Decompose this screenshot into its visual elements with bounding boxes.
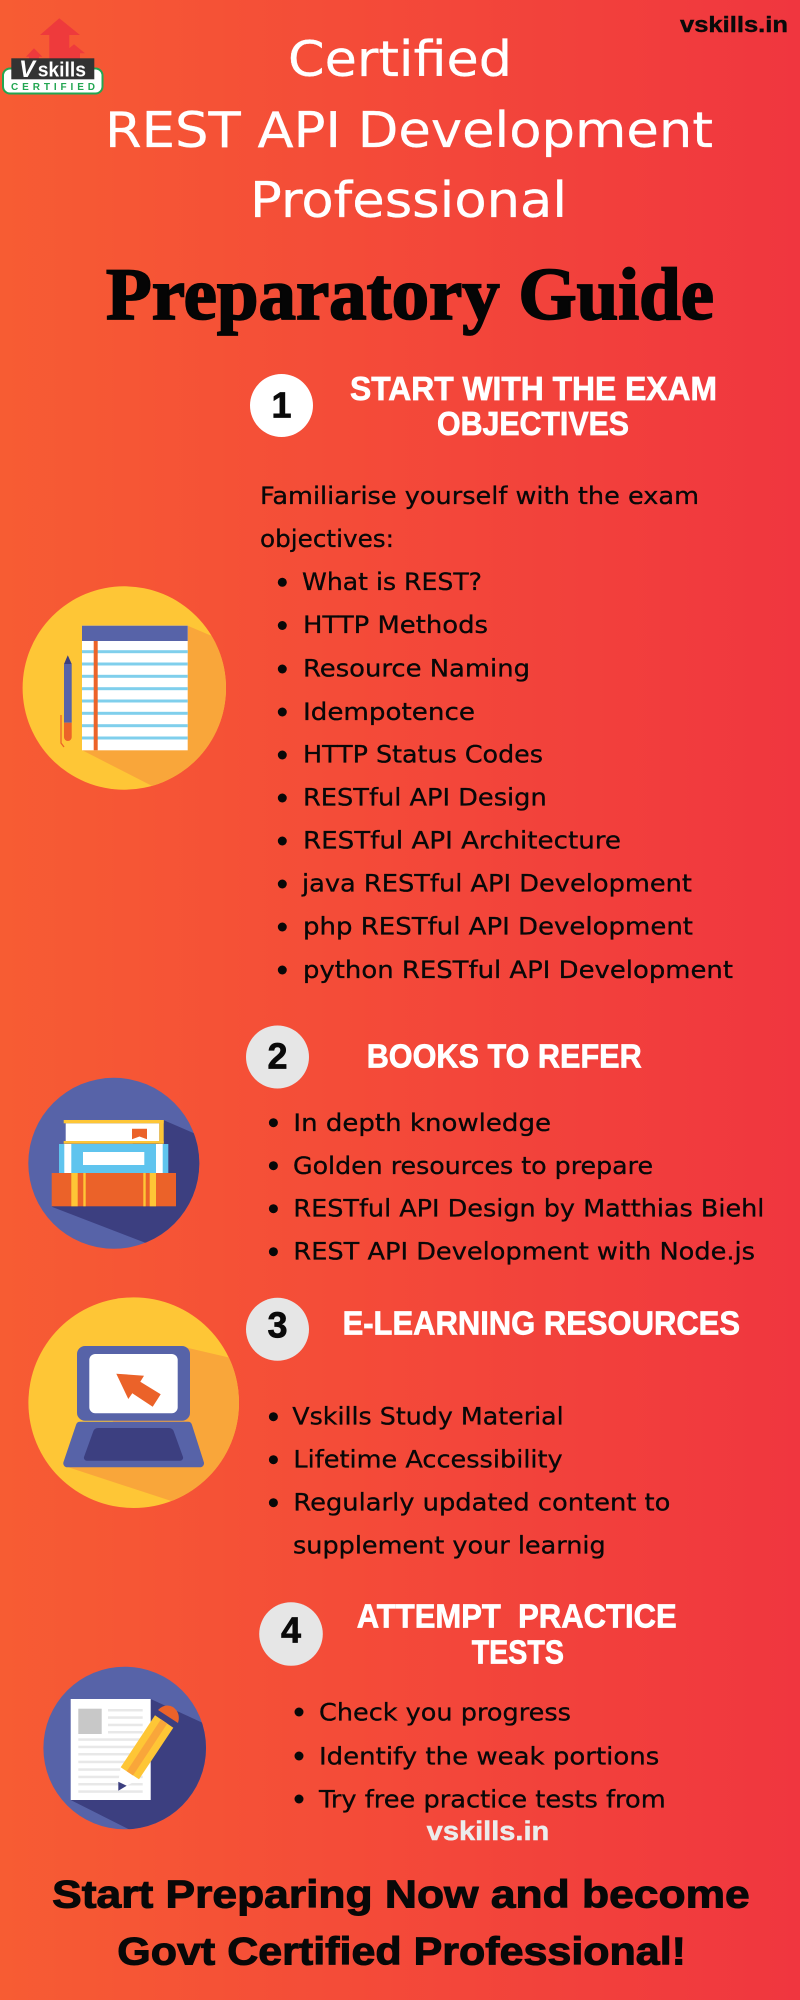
title: Certified xyxy=(288,31,512,88)
logo: Vskills certified: skills xyxy=(38,60,86,82)
title: REST API Development xyxy=(105,102,713,159)
step 4 number badge xyxy=(259,1602,323,1666)
closing call to action: Govt Certified Professional! xyxy=(117,1930,686,1973)
step 3 number badge xyxy=(246,1298,309,1361)
step 1 objectives list xyxy=(278,568,733,984)
step 2 number badge: 2 xyxy=(267,1035,288,1076)
step 4 heading: ATTEMPT PRACTICE xyxy=(357,1598,677,1635)
step 1 intro text xyxy=(260,482,699,553)
step 2 list xyxy=(269,1109,764,1265)
icon: notepad and pen xyxy=(22,586,226,790)
step 1 objectives list: What is REST? xyxy=(302,568,482,596)
step 3 heading: E-LEARNING RESOURCES xyxy=(343,1304,740,1341)
step 4 heading: TESTS xyxy=(472,1633,564,1670)
title: Professional xyxy=(250,172,567,229)
step 1 objectives list: HTTP Status Codes xyxy=(303,741,543,769)
step 3 list: Regularly updated content to xyxy=(293,1489,670,1517)
step 1 objectives list: Idempotence xyxy=(303,698,475,726)
step 2 list: Golden resources to prepare xyxy=(293,1152,653,1180)
step 1 objectives list: python RESTful API Development xyxy=(303,956,733,984)
step 1 objectives list: HTTP Methods xyxy=(303,611,488,639)
step 3 list: Lifetime Accessibility xyxy=(293,1446,563,1474)
icon: stack of books xyxy=(28,1078,200,1249)
website link text: vskills.in xyxy=(427,1816,549,1846)
step 1 objectives list: php RESTful API Development xyxy=(303,913,693,941)
step 1 number badge xyxy=(250,374,313,437)
step 1 heading: START WITH THE EXAM xyxy=(350,370,717,407)
logo: Vskills certified: V xyxy=(19,56,37,83)
logo: Vskills certified xyxy=(3,18,102,93)
logo: Vskills certified: CERTIFIED xyxy=(11,82,95,93)
icon: laptop with cursor arrow xyxy=(28,1297,239,1508)
website label top right: vskills.in xyxy=(680,12,788,37)
icon: document and pencil xyxy=(43,1666,206,1830)
step 2 heading: BOOKS TO REFER xyxy=(367,1037,642,1074)
title xyxy=(105,31,713,229)
step 4 list xyxy=(294,1699,666,1814)
subtitle: Preparatory Guide: Preparatory Guide xyxy=(106,254,714,336)
step 1 objectives list: RESTful API Design xyxy=(303,784,547,812)
step 1 objectives list: RESTful API Architecture xyxy=(303,827,621,855)
step 1 objectives list: java RESTful API Development xyxy=(301,870,692,898)
step 3 list: supplement your learnig xyxy=(293,1532,606,1560)
step 1 objectives list: Resource Naming xyxy=(303,655,530,683)
step 4 list: Try free practice tests from xyxy=(318,1786,666,1814)
step 4 heading xyxy=(357,1598,677,1670)
step 2 list: REST API Development with Node.js xyxy=(293,1237,755,1265)
step 1 heading xyxy=(350,370,717,442)
step 1 number badge: 1 xyxy=(271,385,292,426)
step 3 list xyxy=(269,1402,670,1560)
step 4 list: Identify the weak portions xyxy=(319,1743,659,1771)
step 2 list: RESTful API Design by Matthias Biehl xyxy=(293,1195,764,1223)
step 1 intro text: Familiarise yourself with the exam xyxy=(260,482,699,510)
step 1 intro text: objectives: xyxy=(260,525,394,553)
step 4 list: Check you progress xyxy=(319,1699,571,1727)
step 3 number badge: 3 xyxy=(267,1305,288,1346)
step 2 list: In depth knowledge xyxy=(293,1109,551,1137)
step 2 number badge xyxy=(246,1026,309,1088)
step 3 list: Vskills Study Material xyxy=(292,1402,564,1430)
step 1 heading: OBJECTIVES xyxy=(437,405,629,442)
closing call to action xyxy=(52,1873,750,1973)
step 4 number badge: 4 xyxy=(281,1610,301,1651)
closing call to action: Start Preparing Now and become xyxy=(52,1873,750,1916)
